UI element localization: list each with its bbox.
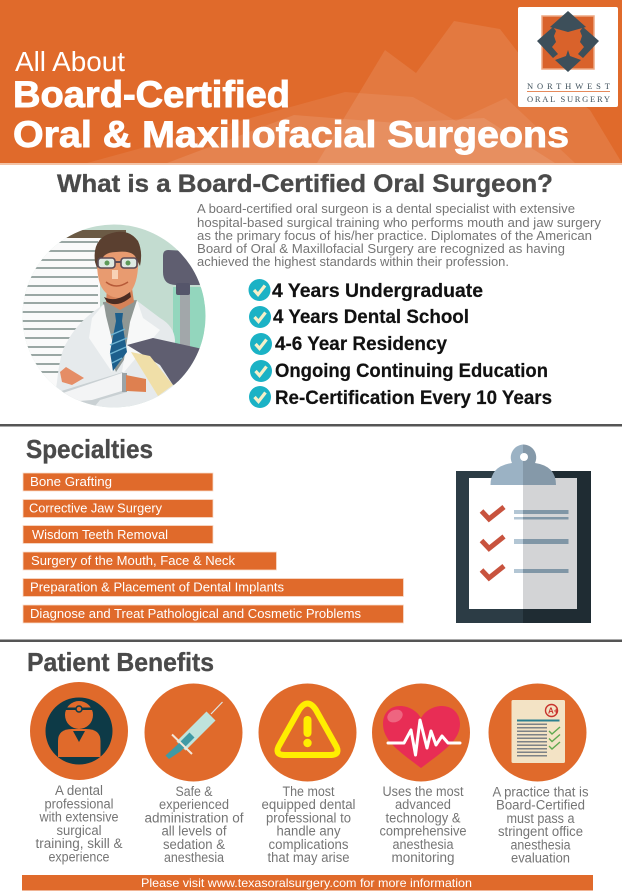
caption: professional to [266, 810, 351, 826]
text block: definition paragraph: achieved the highest standards within their profession. [197, 254, 509, 269]
benefit 1: dental professional [30, 682, 128, 864]
glasses [98, 258, 137, 268]
bar: Diagnose and Treat Pathological and Cosmetic Problems [23, 605, 404, 623]
bar: Diagnose and Treat Pathological and Cosmetic Problems: Diagnose and Treat Pathological and Cosmetic Problems [30, 607, 361, 621]
bar: Preparation and Placement of Dental Implants: Preparation & Placement of Dental Implants [30, 580, 284, 594]
icon: syringe [144, 684, 242, 782]
hair [95, 232, 141, 268]
caption: monitoring [392, 850, 454, 865]
caption [144, 784, 244, 865]
bar: Wisdom Teeth Removal [23, 526, 213, 544]
heading: Patient Benefits: Patient Benefits [27, 647, 214, 677]
caption: stringent office [498, 824, 583, 839]
caption: A practice that is [492, 784, 589, 800]
caption: that may arise [268, 850, 350, 865]
checklist: training requirements [248, 279, 552, 409]
benefit 5: office evaluation [488, 684, 589, 866]
caption: anesthesia [392, 837, 454, 852]
logo: Northwest Oral Surgery: NORTHWEST [527, 81, 611, 91]
caption [492, 784, 589, 866]
surgeon coat [52, 300, 175, 412]
caption: training, skill & [36, 836, 122, 851]
text block: definition paragraph: A board-certified oral surgeon is a dental specialist with extensive [197, 201, 575, 216]
caption: Uses the most [382, 784, 464, 799]
bar: Corrective Jaw Surgery: Corrective Jaw Surgery [29, 502, 163, 516]
logo: Northwest Oral Surgery: ORAL SURGERY [527, 94, 610, 104]
text block: definition paragraph: as the primary focus of his/her practice. Diplomates of the American [197, 228, 592, 243]
text block: definition paragraph: hospital-based surgical training who performs mouth and jaw surgery [197, 215, 602, 230]
text block: definition paragraph [197, 201, 602, 269]
logo: Northwest Oral Surgery [518, 7, 618, 107]
check item: Re-Certification Every 10 Years: Re-Certification Every 10 Years [275, 388, 552, 409]
caption: professional [44, 796, 114, 812]
caption: Safe & [176, 784, 212, 799]
tie [110, 313, 127, 371]
caption: The most [282, 784, 335, 799]
caption [262, 784, 356, 865]
footer bar: Please visit www.texasoralsurgery.com for more information [141, 876, 472, 890]
caption: anesthesia [510, 838, 571, 852]
neck and face [106, 288, 134, 310]
caption: must pass a [506, 811, 575, 826]
icon: graded test paper [488, 684, 586, 782]
list: specialties bars [23, 473, 404, 623]
footer bar [22, 875, 593, 890]
icon: warning triangle [258, 684, 356, 782]
icon: clipboard checklist [456, 444, 591, 623]
caption: technology & [386, 810, 460, 826]
heading: What is a Board-Certified Oral Surgeon?: What is a Board-Certified Oral Surgeon? [57, 170, 553, 198]
caption [380, 784, 466, 865]
caption: experienced [159, 797, 229, 812]
caption: Board-Certified [496, 798, 585, 812]
caption: comprehensive [380, 824, 466, 838]
caption [36, 783, 122, 864]
bar: Surgery of the Mouth, Face and Neck: Surgery of the Mouth, Face & Neck [31, 554, 236, 568]
header mountain pattern [87, 21, 622, 163]
title: All About: All About [15, 46, 125, 77]
bar: Surgery of the Mouth, Face and Neck [23, 552, 276, 570]
caption: advanced [395, 797, 451, 812]
caption: all levels of [162, 824, 227, 838]
caption: evaluation [511, 850, 570, 866]
caption: administration of [144, 810, 244, 826]
caption: sedation & [163, 837, 225, 852]
bar: Preparation and Placement of Dental Implants [23, 578, 404, 596]
arms [62, 372, 126, 406]
benefit 3: handle complications [258, 684, 356, 865]
bar: Bone Grafting [23, 473, 213, 491]
check item: 4 Years Dental School: 4 Years Dental School [273, 307, 469, 328]
caption: equipped dental [262, 797, 356, 812]
caption: experience [48, 850, 110, 864]
icon: dentist [30, 682, 128, 780]
icon: graded test paper: A+ [548, 706, 559, 716]
title: Board-Certified: Board-Certified [13, 74, 290, 115]
caption: with extensive [39, 810, 119, 824]
check item: 4-6 Year Residency: 4-6 Year Residency [275, 334, 447, 355]
caption: handle any [276, 824, 341, 838]
check item: Ongoing Continuing Education: Ongoing Continuing Education [275, 361, 548, 382]
panel: header banner [0, 0, 622, 165]
bar: Bone Grafting: Bone Grafting [30, 475, 112, 489]
caption: A dental [55, 783, 103, 798]
text block: definition paragraph: Board of Oral & Maxillofacial Surgery are recognized as having [197, 241, 565, 256]
dental chair [127, 338, 207, 385]
caption: surgical [56, 823, 102, 838]
bar: Wisdom Teeth Removal: Wisdom Teeth Removal [32, 528, 168, 542]
benefit 2: sedation and anesthesia [144, 684, 244, 865]
heading: Specialties: Specialties [26, 434, 153, 464]
caption: anesthesia [164, 850, 224, 865]
icon: heart with pulse line [372, 684, 470, 782]
caption: complications [268, 837, 349, 852]
check item: 4 Years Undergraduate: 4 Years Undergraduate [272, 281, 483, 302]
benefit 4: anesthesia monitoring [372, 684, 470, 865]
illustration: surgeon portrait [20, 222, 210, 412]
bar: Corrective Jaw Surgery [23, 500, 213, 518]
title: Oral and Maxillofacial Surgeons: Oral & Maxillofacial Surgeons [13, 114, 569, 155]
